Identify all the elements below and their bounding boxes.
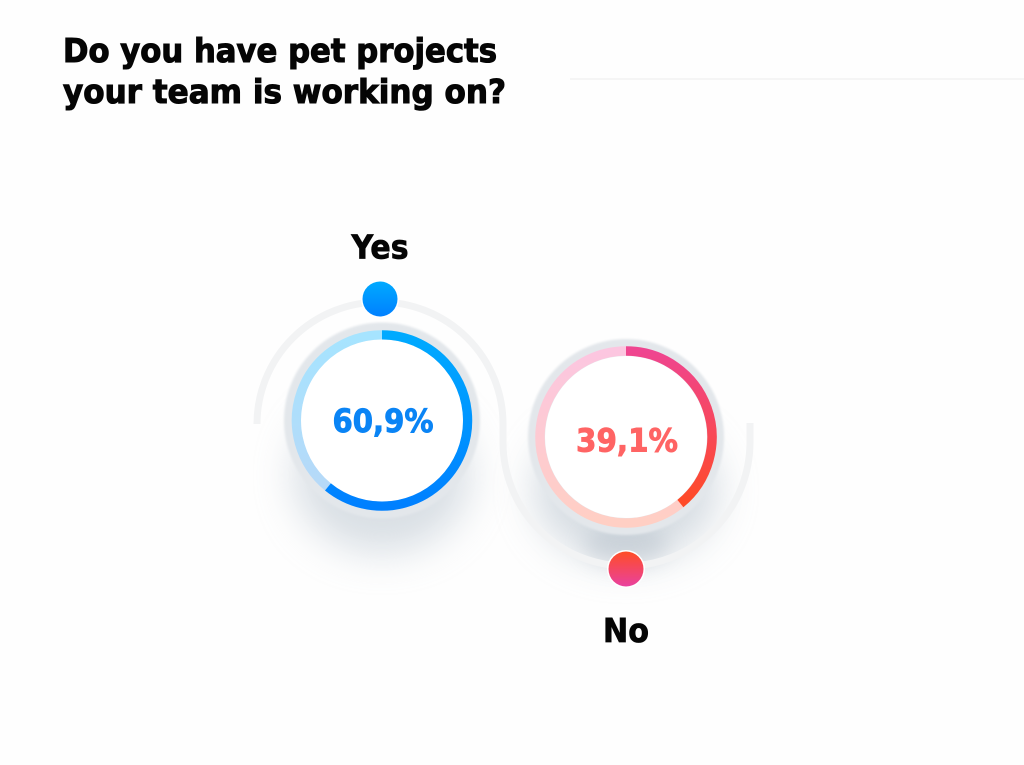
ring value: no 39,1% — [626, 351, 712, 504]
ring track: no remainder — [540, 351, 680, 523]
label: No: No — [603, 611, 649, 650]
value: 39,1%: 39,1% — [576, 422, 678, 460]
panel: yes donut — [284, 322, 480, 518]
shadow: under no ring — [584, 525, 668, 565]
shadow: yes donut — [294, 397, 470, 553]
inner disc: yes — [301, 340, 463, 502]
label: Yes: Yes — [351, 228, 408, 266]
value: 60,9%: 60,9% — [332, 402, 434, 440]
marker: no dot — [607, 550, 645, 588]
ring value: yes 60,9% — [328, 335, 467, 506]
marker: yes dot — [361, 280, 399, 318]
connecting track arc — [257, 302, 750, 566]
inner disc: no — [545, 356, 707, 518]
title: your team is working on? — [63, 72, 506, 111]
title — [63, 31, 506, 111]
panel: no donut — [528, 339, 724, 535]
halo: no donut — [528, 339, 724, 535]
ring track: yes remainder — [296, 335, 382, 487]
halo: yes donut — [284, 322, 480, 518]
title: Do you have pet projects — [63, 31, 497, 70]
shadow: no donut — [534, 418, 718, 562]
